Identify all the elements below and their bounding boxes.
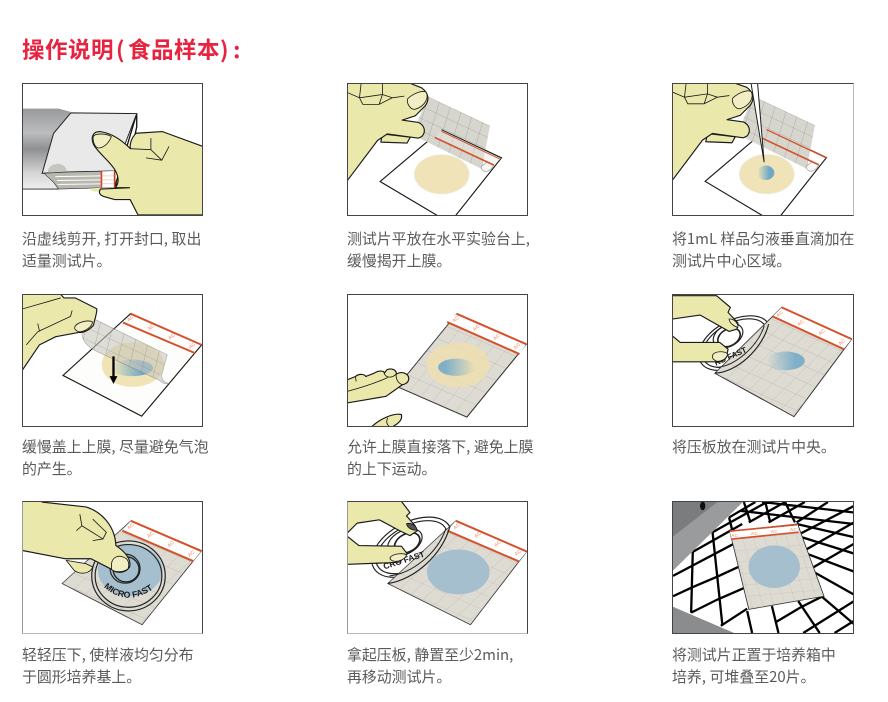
illustration: lifting top film	[347, 83, 528, 216]
red band: AC	[731, 533, 739, 539]
caption: 测试片平放在水平实验台上,	[347, 228, 533, 249]
red band: AC	[817, 328, 827, 337]
caption	[672, 228, 854, 271]
caption	[22, 436, 208, 479]
hand	[347, 83, 428, 181]
panel: step 7	[22, 501, 203, 687]
stack of test sheets	[44, 171, 115, 189]
caption	[347, 436, 533, 479]
spreader rings	[92, 541, 165, 611]
red band: AC	[472, 323, 482, 333]
illustration: pressing spreader	[22, 501, 203, 634]
red band: AC	[492, 333, 502, 342]
panel: step 3	[672, 83, 854, 271]
test sheet	[380, 130, 501, 217]
red band: AC	[775, 309, 785, 319]
panel: step 8	[347, 501, 528, 687]
illustration: placing spreader	[672, 294, 854, 427]
blue culture disc	[98, 545, 163, 596]
sample spread	[438, 359, 475, 376]
culture disc	[426, 343, 490, 387]
pipette	[751, 83, 764, 162]
red band: AC	[513, 548, 523, 558]
caption	[672, 644, 836, 687]
hand	[90, 132, 203, 215]
incubator walls	[673, 502, 743, 634]
incubator wire rack	[673, 502, 854, 633]
illustration: adding sample with pipette	[672, 83, 854, 216]
panel: step 6	[672, 294, 854, 457]
red band: AC	[796, 318, 806, 328]
caption: 适量测试片。	[22, 250, 111, 271]
silver pouch	[23, 109, 71, 189]
caption: 培养,可堆叠至20片。	[672, 666, 815, 687]
peeled film	[418, 97, 494, 171]
caption	[22, 644, 194, 687]
caption: 测试片中心区域。	[672, 250, 791, 271]
spreader rings behind	[690, 305, 780, 382]
caption: 将压板放在测试片中央。	[672, 436, 836, 457]
illustration: lifting spreader	[347, 501, 528, 634]
red band: AC	[473, 530, 483, 540]
red band	[447, 314, 526, 354]
caption	[347, 228, 533, 271]
red band	[730, 525, 799, 539]
red band	[447, 521, 527, 561]
red band: AC	[147, 323, 156, 332]
red band: AC	[451, 315, 461, 324]
red band: AC	[771, 529, 778, 535]
red band	[123, 314, 202, 353]
illustration: incubating on rack	[672, 501, 854, 634]
red band: AC	[126, 314, 136, 323]
peeled film	[743, 96, 819, 171]
red band: AC	[493, 539, 503, 549]
spreader rings behind	[361, 505, 462, 590]
white card back	[115, 114, 137, 187]
spreader front arc and label: CRO FAST	[382, 549, 427, 571]
caption: 的产生。	[22, 458, 82, 479]
caption	[22, 228, 201, 271]
label: MICRO FAST: MICRO FAST	[104, 582, 152, 598]
title: 操作说明 食品样本 :	[22, 33, 241, 65]
red band: AC	[188, 341, 197, 351]
caption: 的上下运动。	[347, 458, 436, 479]
illustration: film dropped on sheet	[347, 294, 528, 427]
spreader front arc and label	[713, 324, 769, 373]
hand	[347, 501, 417, 564]
red band: AC	[126, 522, 136, 531]
red band	[773, 307, 852, 349]
illustration: lowering top film	[22, 294, 203, 427]
peeled film	[82, 316, 170, 384]
caption: 再移动测试片。	[347, 666, 451, 687]
red band: AC	[838, 338, 847, 347]
red band: AC	[790, 527, 797, 533]
red band: AC	[146, 530, 156, 540]
test sheet	[705, 129, 826, 217]
spreader front arc and label	[382, 526, 450, 584]
caption: 将1mL 样品匀液垂直滴加在	[672, 228, 854, 249]
card	[42, 113, 137, 173]
illustration: opening the pouch	[22, 83, 203, 216]
red band: AC	[167, 332, 177, 342]
red band: AC	[187, 549, 197, 559]
panel: step 5	[347, 294, 533, 479]
caption: 将测试片正置于培养箱中	[672, 644, 836, 665]
blue culture disc	[427, 550, 490, 594]
test sheet	[388, 521, 527, 625]
red band: AC	[166, 540, 176, 549]
red band: AC	[751, 531, 758, 537]
caption: 于圆形培养基上。	[22, 666, 141, 687]
red band lines	[760, 130, 827, 165]
caption: 沿虚线剪开,打开封口,取出	[22, 228, 201, 249]
red band: AC	[452, 522, 462, 531]
sample spread	[111, 360, 153, 376]
culture disc	[414, 155, 469, 194]
red band lines	[435, 130, 501, 166]
culture disc	[102, 342, 164, 387]
test sheet	[63, 314, 202, 416]
hand	[22, 294, 97, 370]
panel: step 1	[22, 83, 203, 271]
hand	[22, 501, 130, 573]
test sheet	[397, 314, 526, 417]
caption: 允许上膜直接落下,避免上膜	[347, 436, 533, 457]
panel: step 4	[22, 294, 208, 479]
caption: 缓慢揭开上膜。	[347, 250, 451, 271]
hand	[347, 369, 409, 427]
test sheet	[62, 521, 202, 625]
test sheet	[730, 524, 824, 609]
test sheet	[715, 307, 852, 417]
red band	[122, 521, 202, 561]
blue culture disc	[748, 545, 800, 588]
hand	[672, 296, 738, 362]
arrow down	[110, 356, 117, 384]
red band: AC	[513, 342, 522, 351]
sample drop	[757, 166, 774, 180]
panel: step 9	[672, 501, 854, 687]
sample spread	[767, 351, 805, 370]
caption: 拿起压板,静置至少2min,	[347, 644, 517, 665]
title: )	[220, 33, 229, 65]
spreader front arc and label: RO FAST	[713, 345, 748, 368]
panel: step 2	[347, 83, 533, 271]
title: (	[116, 33, 125, 65]
culture disc	[739, 154, 794, 194]
hand	[672, 83, 753, 180]
caption: 轻轻压下,使样液均匀分布	[22, 644, 194, 665]
caption: 缓慢盖上上膜,尽量避免气泡	[22, 436, 208, 457]
caption	[347, 644, 517, 687]
